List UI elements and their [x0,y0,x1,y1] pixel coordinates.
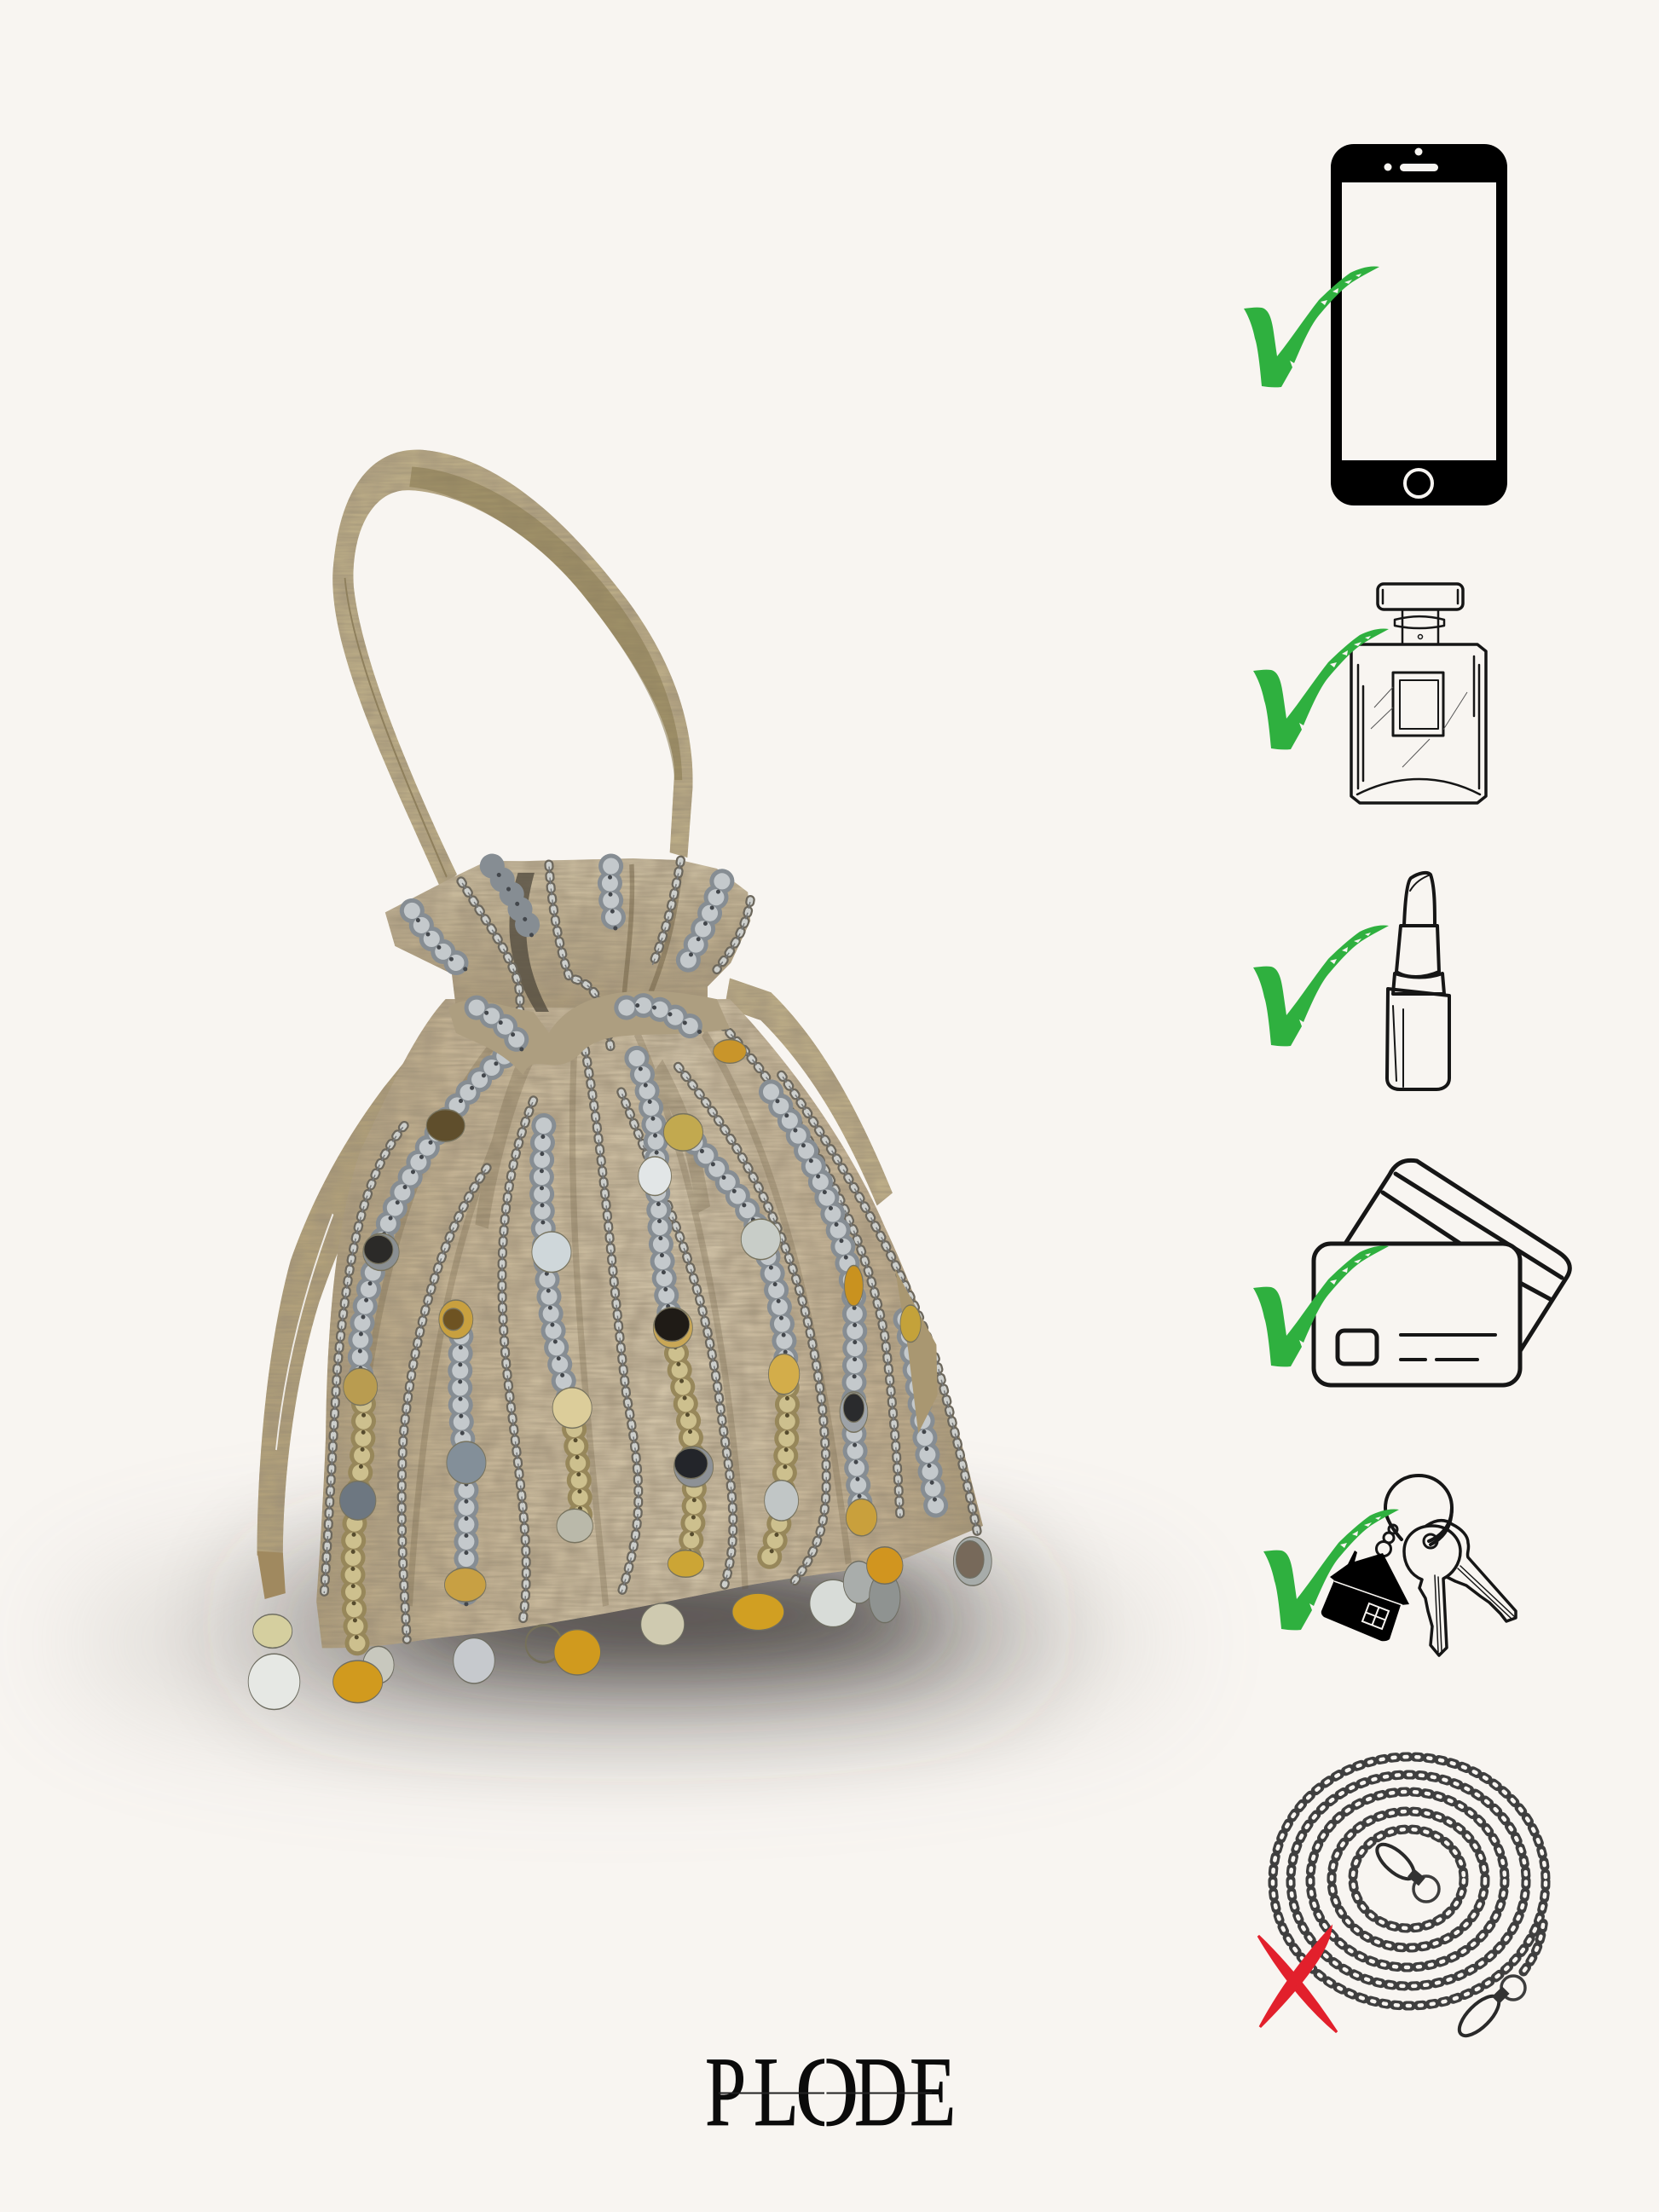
icon: smartphone [1331,144,1507,505]
icon: perfume bottle [1351,584,1486,803]
brand logo: PLODE [705,2036,956,2147]
icon: payment cards [1314,1160,1569,1385]
bag ground shadow [68,1547,1159,1735]
left drawstring [257,1008,466,1599]
beaded vertical lines [324,1025,978,1639]
gathered top frill [385,858,750,1049]
check mark: keys allowed [1263,1509,1399,1630]
icon: house keys [1321,1476,1516,1655]
brand logo: PLODE: D [854,2037,908,2147]
right drawstring lower loop [895,1268,938,1433]
icon: coiled metal chain [1273,1757,1546,2042]
product photo: beaded sequin potli bag [248,450,991,1709]
bag body [316,999,983,1648]
icon: lipstick [1387,873,1449,1089]
brand logo: PLODE: E [910,2036,956,2147]
bag handle [332,450,693,888]
cross mark: chain not included [1258,1928,1337,2032]
brand logo: PLODE: L [754,2037,799,2147]
brand logo: PLODE: O [795,2036,858,2146]
large mirror discs on body [339,1110,921,1602]
hanging disc fringe [248,1537,991,1709]
check mark: cards allowed [1253,1245,1389,1366]
check mark: lipstick allowed [1253,925,1389,1046]
fabric folds [348,1033,848,1606]
sequin columns [353,1046,936,1648]
check mark: phone allowed [1244,266,1379,387]
right drawstring [725,978,893,1205]
check mark: perfume allowed [1253,628,1389,749]
drawstring gather knot [448,991,746,1075]
brand logo: PLODE: P [705,2037,746,2147]
